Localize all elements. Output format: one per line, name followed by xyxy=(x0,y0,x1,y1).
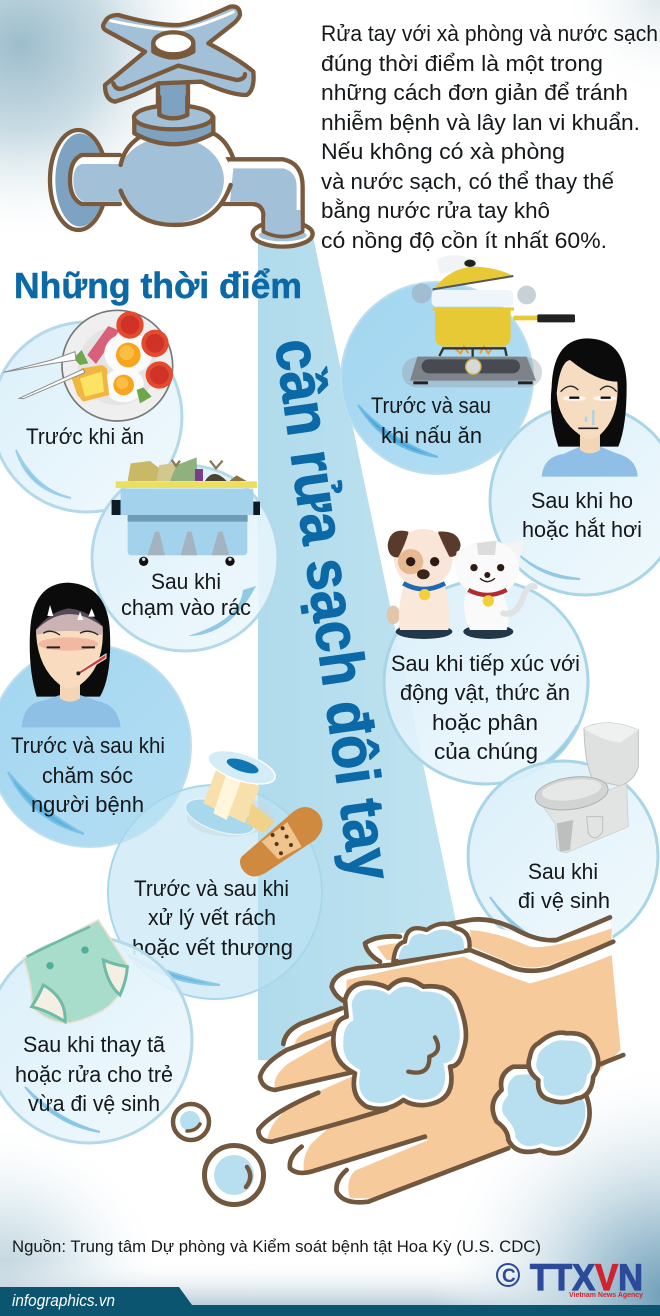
label: Sau khi xyxy=(151,569,221,594)
circle xyxy=(490,405,660,595)
label: hoặc vết thương xyxy=(132,935,293,960)
intro paragraph: Nếu không có xà phòng xyxy=(321,139,565,164)
source note: Nguồn: Trung tâm Dự phòng và Kiểm soát bệnh tật Hoa Kỳ (U.S. CDC) xyxy=(12,1237,541,1256)
icon: trash bin xyxy=(112,457,260,566)
circle xyxy=(108,785,322,999)
label: xử lý vết rách xyxy=(148,905,276,930)
label xyxy=(11,733,165,817)
label xyxy=(522,488,642,542)
white hand backing xyxy=(258,920,618,1202)
tap flange xyxy=(50,130,107,230)
circle xyxy=(0,322,182,512)
label: vừa đi vệ sinh xyxy=(28,1091,160,1116)
label: Trước khi ăn xyxy=(26,424,144,449)
circle xyxy=(341,282,533,474)
label: Sau khi thay tã xyxy=(23,1032,166,1057)
icon: sick woman xyxy=(22,583,121,727)
label: Trước và sau khi xyxy=(134,876,289,901)
label xyxy=(15,1032,173,1116)
label: hoặc rửa cho trẻ xyxy=(15,1062,173,1087)
soap foam: wrist upper xyxy=(529,1033,598,1102)
label: khi nấu ăn xyxy=(381,423,482,448)
label xyxy=(132,876,293,960)
heading: top: Những thời điểm xyxy=(14,265,302,306)
handle body xyxy=(103,6,254,102)
label: hoặc phân xyxy=(432,710,538,735)
circle xyxy=(0,937,192,1143)
tap stem xyxy=(158,80,188,120)
circle xyxy=(384,580,588,784)
label xyxy=(518,859,610,913)
small bubble xyxy=(173,1104,209,1140)
icon: tap handle xyxy=(103,6,254,102)
intro paragraph xyxy=(321,21,658,253)
copyright mark xyxy=(497,1264,519,1286)
footer bar xyxy=(0,1287,660,1316)
intro paragraph: bằng nước rửa tay khô xyxy=(321,198,550,223)
panel: before and after cooking xyxy=(341,255,575,474)
label: Sau khi xyxy=(528,859,598,884)
handle inner lines xyxy=(113,66,245,89)
tap pipe xyxy=(70,155,120,204)
intro paragraph: đúng thời điểm là một trong xyxy=(321,51,603,76)
panel: after coughing or sneezing xyxy=(490,338,660,595)
label: Trước và sau khi xyxy=(11,733,165,758)
panel: after using the toilet xyxy=(468,723,658,951)
label xyxy=(121,569,251,620)
circle xyxy=(468,761,658,951)
skin xyxy=(267,928,621,1198)
label: Sau khi tiếp xúc với xyxy=(391,651,580,676)
handle cap xyxy=(153,43,193,57)
label xyxy=(391,651,580,764)
icon: breakfast plate xyxy=(3,310,173,421)
intro paragraph: và nước sạch, có thể thay thế xyxy=(321,169,614,194)
soap foam: large xyxy=(333,980,466,1109)
label: đi vệ sinh xyxy=(518,888,610,913)
icon: dog and cat xyxy=(387,529,535,639)
website label: infographics.vn xyxy=(12,1291,115,1310)
intro paragraph: nhiễm bệnh và lây lan vi khuẩn. xyxy=(321,110,640,135)
icon: toilet xyxy=(533,723,638,853)
label: chăm sóc xyxy=(42,763,133,788)
icon: diaper xyxy=(23,920,128,1023)
label: hoặc hắt hơi xyxy=(522,517,642,542)
logo: TTXVN: C xyxy=(502,1266,516,1287)
heading: vertical: cần rửa sạch đôi tay xyxy=(261,334,406,885)
label: Trước và sau xyxy=(371,393,491,418)
icon: water tap xyxy=(50,80,313,247)
icon: soapy hands xyxy=(258,917,623,1202)
agency name: Vietnam News Agency xyxy=(569,1292,643,1299)
panel: caring for the sick xyxy=(0,583,191,847)
soap foam: thumb xyxy=(393,924,470,962)
tap spout xyxy=(220,159,303,230)
water stream xyxy=(258,236,500,1070)
intro paragraph: có nồng độ cồn ít nhất 60%. xyxy=(321,228,607,253)
label: chạm vào rác xyxy=(121,595,251,620)
panel: after touching garbage xyxy=(92,457,278,651)
tap body xyxy=(118,132,232,224)
icon: pot on stove xyxy=(402,255,575,387)
label: Sau khi ho xyxy=(531,488,633,513)
panel: changing diapers xyxy=(0,920,192,1143)
panel: after contact with animals xyxy=(384,529,588,784)
large bubble xyxy=(204,1146,264,1204)
intro paragraph: những cách đơn giản để tránh xyxy=(321,80,628,105)
label xyxy=(371,393,491,448)
panel: treating a wound xyxy=(108,744,323,999)
tap rim xyxy=(253,221,313,247)
hand outlines xyxy=(258,917,623,1202)
tap collar xyxy=(134,117,213,144)
label: của chúng xyxy=(434,739,538,764)
handle highlight xyxy=(111,12,233,30)
wordmark: TTXVN xyxy=(530,1258,643,1299)
label: động vật, thức ăn xyxy=(400,680,570,705)
circle xyxy=(92,465,278,651)
soap foam: wrist lower xyxy=(493,1067,590,1153)
icon: bandage roll and plaster xyxy=(181,744,323,877)
icon: soap bubbles xyxy=(173,1104,264,1204)
label: người bệnh xyxy=(31,792,144,817)
panel: before eating xyxy=(0,310,182,512)
logo: TTXVN xyxy=(497,1258,643,1299)
circle xyxy=(0,645,191,847)
icon: woman with runny nose xyxy=(542,338,638,477)
